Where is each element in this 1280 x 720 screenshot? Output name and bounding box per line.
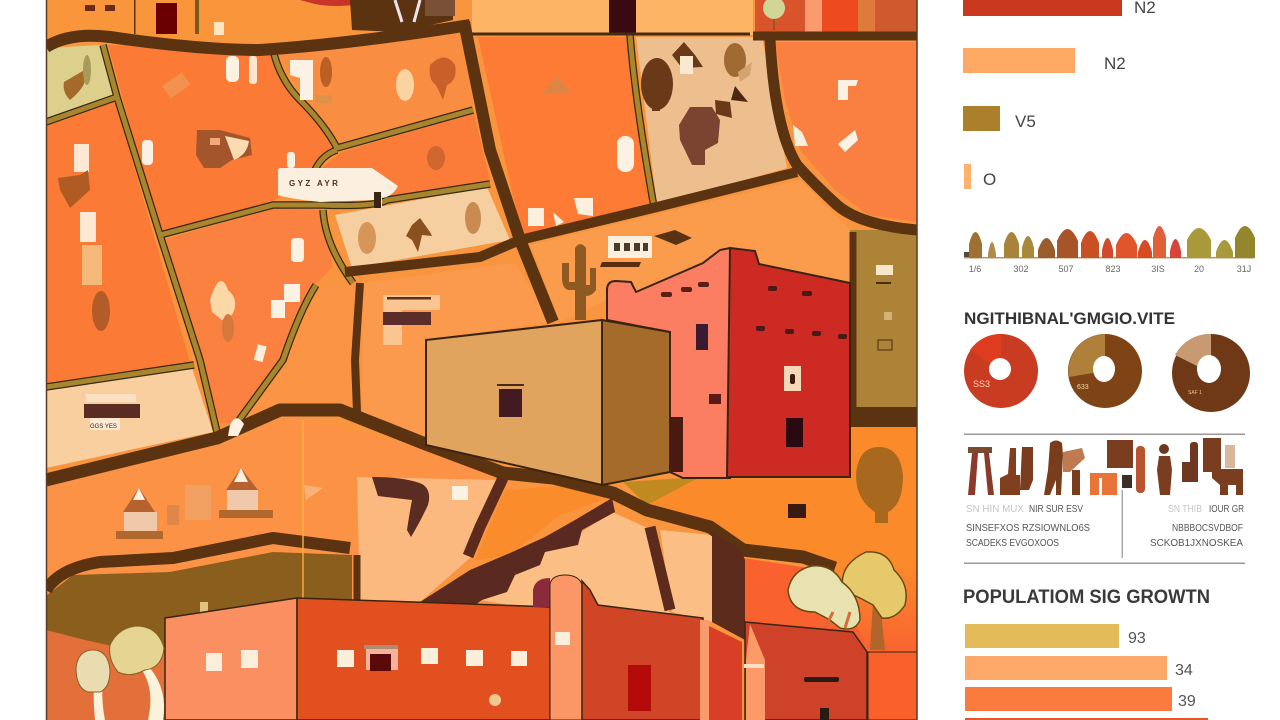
illustrated map panel: [46, 0, 917, 720]
donut chart 1: SS3: [973, 379, 990, 389]
figure captions: SN HIN MUX: [966, 504, 1024, 515]
trees: [76, 552, 906, 720]
bar chart: top categories: O: [983, 170, 996, 189]
top strip of buildings: [85, 0, 916, 35]
figure captions: SINSEFXOS RZSIOWNLO6S: [966, 523, 1090, 534]
figure captions: SCADEKS EVGOXOOS: [966, 538, 1059, 549]
mini silhouette chart: [964, 226, 1255, 274]
figure captions: SCKOB1JXNOSKEA: [1150, 538, 1243, 549]
figure captions: IOUR GR: [1209, 504, 1244, 515]
bar chart: population growth: 93: [1128, 630, 1146, 647]
donut chart 2: 633: [1077, 384, 1089, 391]
bottom buildings: [165, 575, 917, 720]
bar chart: population growth: 39: [1178, 693, 1196, 710]
mini silhouette chart: 20: [1194, 264, 1204, 274]
figure illustrations: [968, 438, 1243, 495]
parcel details: [58, 42, 893, 710]
map frame: [46, 0, 917, 720]
bar chart: top categories: N2: [1104, 54, 1126, 73]
mini silhouette chart: 823: [1105, 264, 1121, 274]
small parcel caption: GGS YES: [90, 424, 117, 430]
mini silhouette chart: 31J: [1237, 264, 1251, 274]
bar chart: population growth: [965, 624, 1208, 720]
tan cube building: [426, 320, 670, 485]
cactus: [562, 244, 596, 320]
bar chart: top categories: [963, 0, 1156, 189]
mini silhouette chart: 302: [1013, 264, 1029, 274]
olive secondary roads: [46, 35, 654, 432]
mini silhouette chart: 1/6: [969, 264, 981, 274]
figure captions: [966, 504, 1244, 549]
donut chart 3: [1172, 334, 1250, 412]
dark main roads: [46, 22, 917, 610]
donut chart 2: [1068, 334, 1142, 408]
red tower building: [607, 248, 850, 478]
heading: population growth: POPULATIOM SIG GROWTN: [963, 587, 1210, 608]
bar chart: top categories: V5: [1015, 112, 1036, 131]
map parcels: [46, 30, 917, 720]
mini silhouette chart: 3IS: [1151, 264, 1165, 274]
tiered huts: [116, 468, 273, 539]
small building label: GYZ AYR: [289, 179, 340, 188]
donut chart 3: SAF 1: [1188, 390, 1202, 396]
figure captions: SN THIB: [1168, 504, 1202, 515]
bar chart: population growth: 34: [1175, 662, 1193, 679]
stepped dark path: [420, 498, 615, 605]
figure captions: NBBBOCSVDBOF: [1172, 523, 1243, 534]
panel: sidebar statistics: [963, 0, 1255, 720]
heading: donut section: NGITHIBNAL'GMGIO.VITE: [964, 309, 1175, 328]
mini silhouette chart: 507: [1058, 264, 1074, 274]
figure captions: NIR SUR ESV: [1029, 504, 1083, 515]
donut chart 1: [964, 334, 1038, 408]
tree: brown: [856, 447, 903, 523]
